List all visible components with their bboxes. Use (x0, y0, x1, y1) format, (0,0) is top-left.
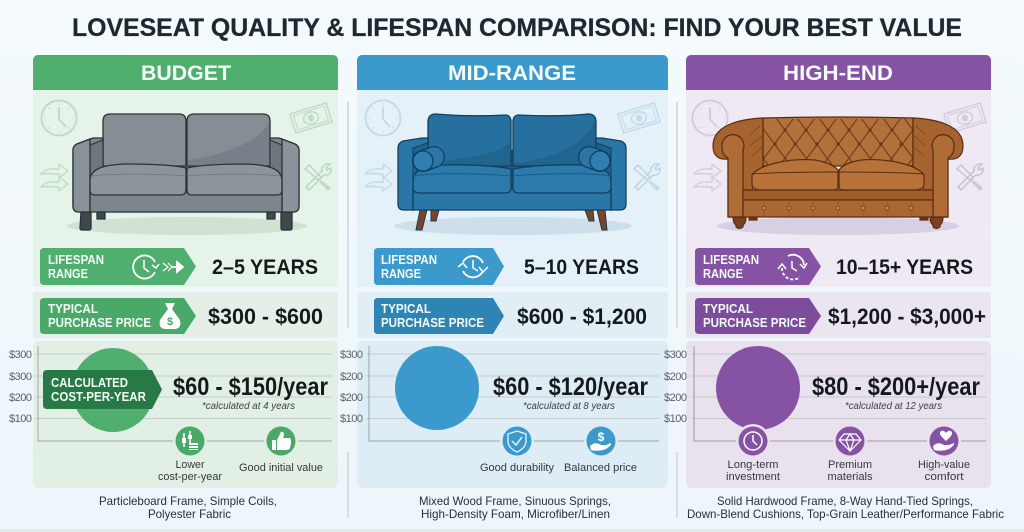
cost label: COST-PER-YEAR (51, 390, 146, 404)
cost chart (664, 346, 986, 441)
high-end header (686, 55, 991, 90)
cost chart: $100 (340, 413, 363, 425)
budget header: BUDGET (141, 62, 231, 85)
price row: TYPICAL (48, 302, 98, 316)
construction text (419, 494, 611, 521)
lifespan row: RANGE (381, 267, 421, 281)
cost chart: $300 (9, 349, 32, 361)
lifespan row: LIFESPAN (381, 253, 437, 267)
price row: $300 - $600 (208, 304, 323, 329)
price row (374, 298, 647, 334)
price row: PURCHASE PRICE (48, 316, 151, 330)
cost chart: $60 - $120/year (493, 373, 648, 401)
lifespan row (40, 248, 318, 285)
benefit: high-value comfort (918, 424, 970, 483)
lifespan row (695, 248, 973, 285)
price row: $1,200 - $3,000+ (828, 304, 986, 329)
price row: TYPICAL (381, 302, 431, 316)
benefit: premium materials: materials (828, 471, 873, 483)
icon: clock with arrows (133, 256, 183, 278)
cost chart: $200 (9, 392, 32, 404)
icon: money bag (160, 303, 180, 329)
panel: mid-range (340, 55, 668, 521)
icon: money bag: $ (167, 316, 173, 328)
cost chart: $300 (664, 349, 687, 361)
cost label (43, 370, 162, 409)
construction text: Down-Blend Cushions, Top-Grain Leather/Performance Fabric (687, 507, 1004, 521)
price row (40, 298, 323, 334)
column dividers (348, 102, 677, 518)
cost bubble (716, 346, 800, 430)
high-end header: HIGH-END (783, 62, 893, 85)
icon: faded tools (957, 164, 983, 191)
icon: faded money (618, 103, 660, 133)
cost label: CALCULATED (51, 376, 128, 390)
cost chart: *calculated at 8 years (523, 401, 615, 412)
cost chart: $100 (664, 413, 687, 425)
lifespan row: RANGE (703, 267, 743, 281)
cost bubble (395, 346, 479, 430)
cost chart: $300 (9, 371, 32, 383)
construction text: High-Density Foam, Microfiber/Linen (421, 507, 610, 521)
construction text: Polyester Fabric (148, 507, 231, 521)
icon: faded clock (366, 100, 400, 136)
lifespan row (374, 248, 639, 285)
benefit: good durability: Good durability (480, 462, 554, 474)
icon: faded arrows (694, 164, 721, 191)
grey loveseat illustration (67, 114, 307, 235)
mid-range header: MID-RANGE (448, 62, 576, 85)
cost chart: $200 (664, 392, 687, 404)
benefit: good initial value: Good initial value (239, 462, 323, 474)
benefit: long-term investment: Long-term (728, 459, 778, 471)
construction text: Particleboard Frame, Simple Coils, (99, 494, 277, 508)
cost bubble (72, 348, 154, 432)
lifespan row: 5–10 YEARS (524, 256, 639, 279)
cost chart: *calculated at 12 years (845, 401, 942, 412)
icon: faded money (944, 103, 986, 133)
cost chart: $60 - $150/year (173, 373, 328, 401)
high-end panel backgrounds (686, 88, 991, 488)
construction text: Mixed Wood Frame, Sinuous Springs, (419, 494, 611, 508)
construction text (687, 494, 1004, 521)
benefit: lower cost: Lower (176, 459, 205, 471)
cost chart: $200 (340, 371, 363, 383)
cost chart (340, 346, 659, 441)
mid-range panel backgrounds (357, 88, 668, 488)
lifespan row: 2–5 YEARS (212, 256, 318, 279)
price row: TYPICAL (703, 302, 753, 316)
price row: $600 - $1,200 (517, 304, 647, 329)
benefit: long-term investment (726, 424, 780, 483)
price row (695, 298, 986, 334)
panel: budget (9, 55, 338, 521)
icon: dashed clock arrows (778, 255, 807, 280)
cost chart: $300 (340, 349, 363, 361)
icon: faded arrows (365, 164, 392, 191)
lifespan row: RANGE (48, 267, 88, 281)
mid-range header (357, 55, 668, 90)
benefit: lower cost: cost-per-year (158, 471, 222, 483)
cost chart: $80 - $200+/year (812, 373, 980, 401)
cost chart: $200 (340, 392, 363, 404)
budget panel backgrounds (33, 88, 338, 488)
construction text (99, 494, 277, 521)
icon: faded arrows (41, 164, 68, 191)
icon: circular clock arrows (458, 256, 488, 277)
benefit: premium materials: Premium (828, 459, 872, 471)
lifespan row: 10–15+ YEARS (836, 256, 973, 279)
benefit: long-term investment: investment (726, 471, 780, 483)
benefit: good initial value (239, 424, 323, 474)
construction text: Solid Hardwood Frame, 8-Way Hand-Tied Springs, (717, 494, 973, 508)
price row: PURCHASE PRICE (703, 316, 806, 330)
cost chart: $200 (664, 371, 687, 383)
price row: PURCHASE PRICE (381, 316, 484, 330)
icon: faded money (290, 103, 332, 133)
cost chart: $100 (9, 413, 32, 425)
benefit: premium materials (828, 424, 873, 483)
icon: faded clock (692, 100, 728, 136)
cost chart: *calculated at 4 years (202, 401, 295, 412)
benefit: lower cost (158, 424, 222, 483)
panel: high-end (664, 55, 1004, 521)
icon: faded tools (634, 164, 660, 191)
benefit: good durability (480, 424, 554, 474)
benefit: high-value comfort: High-value (918, 459, 970, 471)
benefit: balanced price: $ (598, 430, 605, 444)
lifespan row: LIFESPAN (703, 253, 759, 267)
icon: faded clock (42, 100, 76, 136)
title: LOVESEAT QUALITY & LIFESPAN COMPARISON: FIND YOUR BEST VALUE (72, 14, 962, 42)
budget header (33, 55, 338, 90)
cost chart (9, 346, 332, 441)
benefit: high-value comfort: comfort (924, 471, 964, 483)
benefit: balanced price: Balanced price (564, 462, 637, 474)
chesterfield loveseat illustration (713, 117, 963, 235)
icon: faded tools (305, 164, 331, 191)
lifespan row: LIFESPAN (48, 253, 104, 267)
benefit: balanced price (564, 424, 637, 474)
blue loveseat illustration (394, 114, 632, 235)
